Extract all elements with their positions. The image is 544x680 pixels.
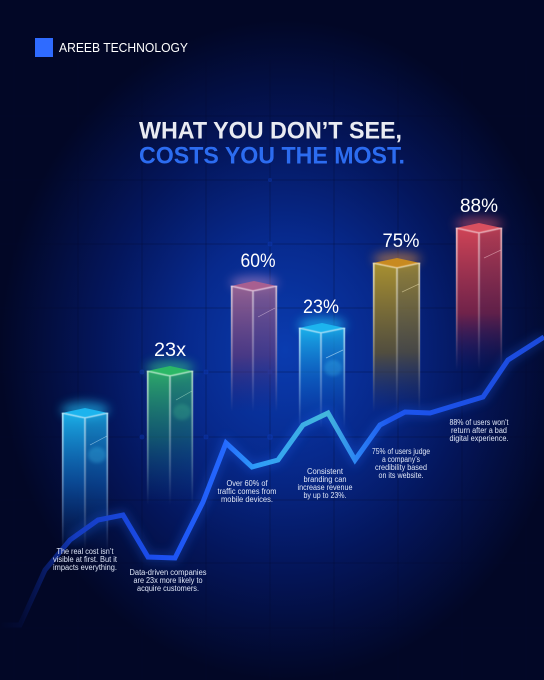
value 23x: 23x <box>154 340 187 361</box>
bar 3: mauve <box>230 276 278 412</box>
caption 3: mobile devices. <box>221 495 273 504</box>
bar 2: green <box>146 360 194 505</box>
caption 4: by up to 23%. <box>304 491 346 500</box>
caption 4 <box>298 467 352 500</box>
caption 2: are 23x more likely to <box>134 576 203 585</box>
caption 5: on its website. <box>378 471 424 480</box>
bar 4: cyan <box>298 317 346 428</box>
value 88%: 88% <box>460 196 498 217</box>
logo mark <box>35 38 53 57</box>
caption 5: credibility based <box>375 463 427 472</box>
caption 4: Consistent <box>307 467 344 476</box>
bar 5: gold <box>373 252 421 412</box>
title line 2: COSTS YOU THE MOST. <box>139 142 405 170</box>
caption 6: return after a bad <box>451 426 507 435</box>
caption 5 <box>372 447 430 480</box>
value labels <box>154 196 498 361</box>
caption 1: impacts everything. <box>53 563 117 572</box>
title <box>139 118 405 170</box>
value 23%: 23% <box>303 297 339 318</box>
value 60%: 60% <box>240 251 276 272</box>
caption 5: 75% of users judge <box>372 447 430 456</box>
caption 1: visible at first. But it <box>53 555 118 564</box>
caption 4: branding can <box>304 475 346 484</box>
caption 6: 88% of users won’t <box>450 418 509 427</box>
logo <box>35 38 188 57</box>
caption 3: Over 60% of <box>226 479 268 488</box>
title line 1: WHAT YOU DON’T SEE, <box>139 118 402 144</box>
caption 2: Data-driven companies <box>130 568 207 577</box>
value 75%: 75% <box>382 231 420 252</box>
caption 5: a company’s <box>382 455 420 464</box>
caption 2 <box>130 568 207 593</box>
caption 1 <box>53 547 118 572</box>
caption 1: The real cost isn’t <box>56 547 114 556</box>
caption 6 <box>450 418 509 443</box>
trend line <box>0 337 544 625</box>
caption 6: digital experience. <box>450 434 508 443</box>
caption 3 <box>218 479 276 504</box>
logo name: AREEB TECHNOLOGY <box>59 40 188 55</box>
caption 4: increase revenue <box>298 483 352 492</box>
caption 3: traffic comes from <box>218 487 276 496</box>
caption 2: acquire customers. <box>137 584 199 593</box>
bar 1: cyan <box>61 402 109 552</box>
bar 6: red <box>455 217 503 370</box>
